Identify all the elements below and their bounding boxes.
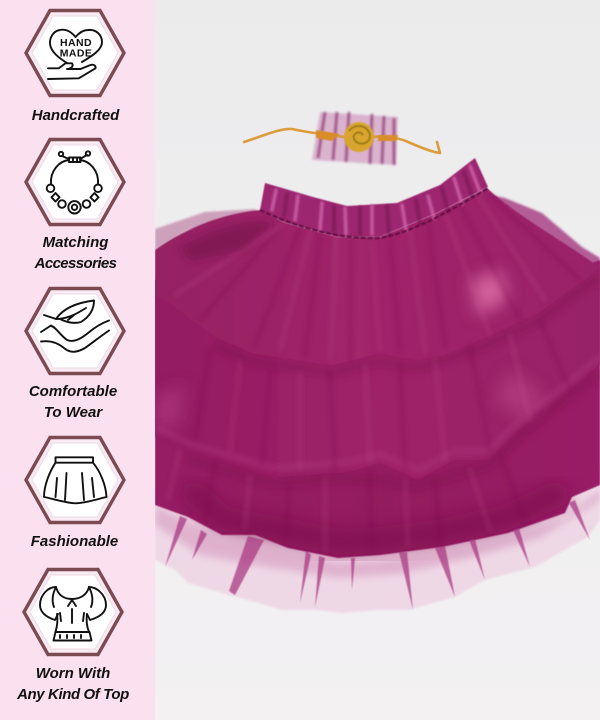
hair clip tulle	[312, 112, 398, 165]
label: comfortable to wear: Comfortable	[29, 383, 117, 400]
background: white fur	[155, 0, 600, 720]
hem tulle streaks	[165, 500, 590, 610]
middle tier hem shadow	[188, 372, 600, 486]
icon: bracelet in hexagon	[24, 138, 126, 226]
top tier pleat folds	[168, 195, 580, 550]
feature: matching accessories	[24, 138, 126, 272]
feature: handcrafted	[24, 8, 126, 124]
label: matching accessories	[34, 234, 116, 272]
satin sheen patches	[155, 270, 545, 430]
icon: feather and waves in hexagon	[24, 286, 126, 376]
hair clip rose	[344, 122, 374, 152]
top tier hem shadow	[215, 276, 600, 373]
label: handcrafted: Handcrafted	[32, 107, 119, 124]
label: comfortable to wear: To Wear	[44, 404, 102, 420]
pale tulle underlayer hem	[155, 470, 600, 613]
waistband stitching	[260, 188, 488, 238]
dark satin band above hem	[195, 495, 555, 542]
label: matching accessories: Accessories	[35, 254, 116, 272]
pale tulle banding	[155, 490, 600, 578]
waistband satin folds	[272, 166, 480, 235]
skirt layer 1: top tier	[155, 188, 600, 365]
feature: worn with any kind of top	[16, 568, 129, 702]
panel: feature sidebar	[0, 0, 155, 720]
icon: blouse in hexagon	[22, 568, 124, 656]
skirt layer 2: middle tier	[155, 262, 600, 480]
top tier dark upper-left gather	[180, 221, 275, 262]
label: matching accessories: Matching	[43, 234, 108, 251]
hair clip ribbon	[244, 129, 440, 153]
back tulle: left and right pale edges	[155, 195, 600, 290]
waistband	[260, 158, 488, 237]
icon: handmade heart in hexagon	[24, 8, 126, 98]
label: worn with any kind of top: Worn With	[36, 665, 110, 682]
icon: skirt in hexagon	[24, 436, 126, 524]
icon: handmade heart in hexagon: HAND	[60, 37, 91, 49]
skirt layer 3: satin lower tier	[155, 260, 600, 558]
label: comfortable to wear	[29, 383, 117, 420]
label: worn with any kind of top	[16, 665, 129, 702]
icon: handmade heart in hexagon: MADE	[59, 48, 92, 60]
feature: fashionable	[24, 436, 126, 550]
feature: comfortable to wear	[24, 286, 126, 420]
label: fashionable: Fashionable	[31, 533, 118, 550]
label: worn with any kind of top: Any Kind Of Top	[17, 686, 129, 702]
photo: tiered tulle skirt with rose hair clip	[155, 110, 600, 613]
middle tier hem band	[155, 356, 600, 470]
